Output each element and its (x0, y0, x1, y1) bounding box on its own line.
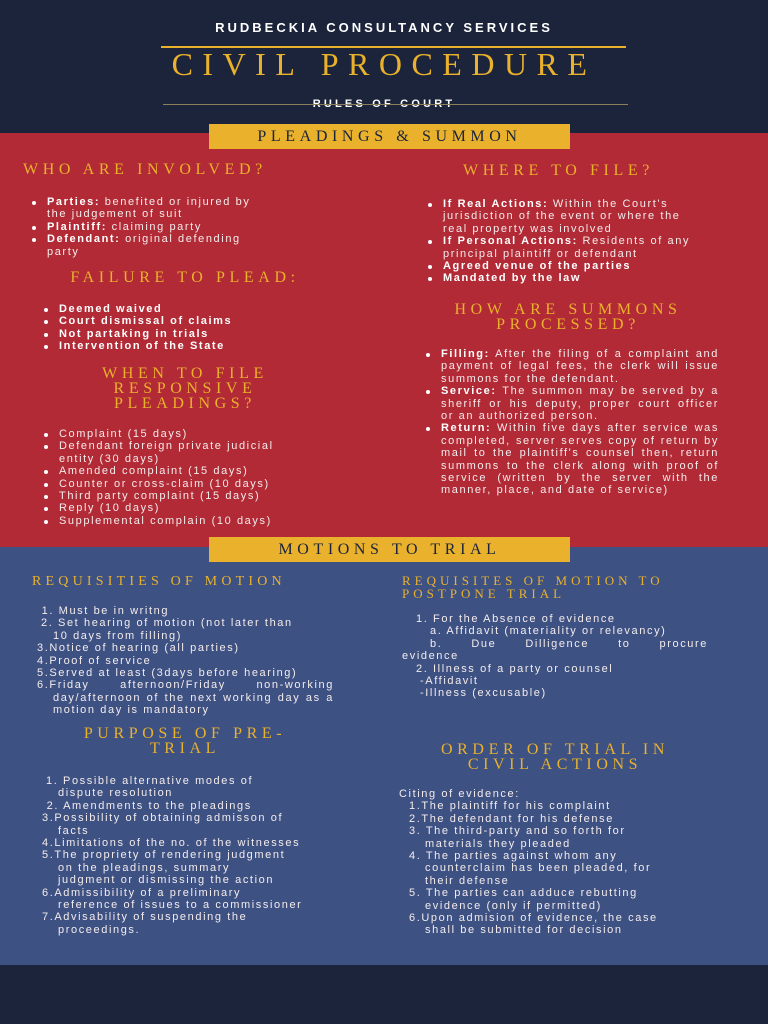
list: purpose: judgment or dismissing the action (58, 874, 274, 886)
list: who are involved: the judgement of suit (47, 208, 183, 220)
list: order of trial: evidence (only if permitted) (425, 900, 602, 912)
list: order of trial: Citing of evidence: (399, 788, 520, 800)
list: when to file: Reply (10 days) (59, 502, 160, 514)
subtitle: RULES OF COURT (313, 98, 455, 110)
list: requisities: 3.Notice of hearing (all parties) (37, 642, 240, 654)
heading: order of trial (441, 741, 669, 773)
heading: when to file: RESPONSIVE (114, 380, 256, 397)
list: order of trial (399, 788, 658, 936)
list: when to file (44, 428, 274, 527)
list: postpone: Dilligence (525, 638, 589, 650)
list: requisities: 5.Served at least (3days before hearing) (37, 667, 297, 679)
list: where to file: jurisdiction of the event or where the (443, 210, 681, 222)
list: postpone: Due (471, 638, 496, 650)
heading: purpose of pre-trial: TRIAL (150, 740, 220, 757)
heading: purpose of pre-trial (84, 725, 286, 757)
heading: summons: PROCESSED? (496, 316, 640, 333)
section banner: motions (209, 537, 570, 562)
list: failure to plead: Deemed waived (59, 303, 162, 315)
list: where to file: Agreed venue of the parties (443, 260, 631, 272)
list: postpone: -Illness (excusable) (420, 687, 547, 699)
list: order of trial: 4. The parties against whom any (409, 850, 617, 862)
list: purpose: 4.Limitations of the no. of the witnesses (42, 837, 300, 849)
heading: postpone trial: POSTPONE TRIAL (402, 586, 565, 601)
heading: order of trial: ORDER OF TRIAL IN (441, 741, 669, 758)
list: failure to plead (44, 303, 232, 352)
list: postpone: evidence (402, 650, 459, 662)
heading: postpone trial: REQUISITES OF MOTION TO (402, 573, 664, 588)
title: CIVIL PROCEDURE (172, 46, 596, 82)
list: when to file: Defendant foreign private judicial (59, 440, 274, 452)
list: who are involved: party (47, 246, 79, 258)
list: postpone: b. (430, 638, 442, 650)
blue section (0, 547, 768, 965)
list: purpose: 6.Admissibility of a preliminary (42, 887, 241, 899)
list: purpose: 1. Possible alternative modes of (46, 775, 253, 787)
section banner: pleadings (209, 124, 570, 149)
list: order of trial: shall be submitted for decision (425, 924, 623, 936)
list: where to file: principal plaintiff or defendant (443, 248, 638, 260)
heading: who are involved: WHO ARE INVOLVED? (23, 161, 267, 178)
list: purpose: 3.Possibility of obtaining admisson of (42, 812, 283, 824)
section banner: pleadings: PLEADINGS & SUMMON (257, 128, 522, 145)
list: purpose: dispute resolution (58, 787, 173, 799)
list: purpose: proceedings. (58, 924, 140, 936)
heading: when to file: WHEN TO FILE (102, 365, 268, 382)
list: order of trial: 5. The parties can adduce rebutting (409, 887, 638, 899)
list: when to file: Amended complaint (15 days) (59, 465, 248, 477)
list: requisities: 6.Friday afternoon/Friday non-working day/afternoon of the next working day as a motion day is mandatory (37, 679, 334, 716)
list: where to file: Mandated by the law (443, 272, 581, 284)
list: who are involved: Parties: benefited or injured by (47, 196, 250, 208)
heading: order of trial: CIVIL ACTIONS (468, 756, 642, 773)
list: requisities (37, 605, 334, 716)
list: postpone: to (618, 638, 630, 650)
list: failure to plead: Not partaking in trials (59, 328, 209, 340)
heading: when to file (102, 365, 268, 412)
heading: postpone trial (402, 573, 664, 601)
list: postpone: 2. Illness of a party or counsel (416, 663, 613, 675)
list: who are involved (32, 196, 250, 258)
list: requisities: 2. Set hearing of motion (not later than (41, 617, 293, 629)
list: summons: Return: Within five days after service was completed, server serves copy of return by mail to the plaintiff's counsel then, return summons to the clerk along with proof of service (written by the server with the manner, place, and date of service) (441, 422, 719, 496)
list: postpone: a. Affidavit (materiality or relevancy) (430, 625, 666, 637)
list: order of trial: 2.The defendant for his defense (409, 813, 614, 825)
section banner: motions: MOTIONS TO TRIAL (278, 541, 501, 558)
list: where to file: If Personal Actions: Residents of any (443, 235, 690, 247)
heading: requisities of motion: REQUISITIES OF MOTION (32, 574, 286, 589)
red section (0, 133, 768, 547)
list: order of trial: counterclaim has been pleaded, for (425, 862, 651, 874)
heading: failure to plead: FAILURE TO PLEAD: (70, 269, 300, 286)
list: who are involved: Defendant: original defending (47, 233, 241, 245)
list: when to file: entity (30 days) (59, 453, 160, 465)
list: order of trial: their defense (425, 875, 509, 887)
list: purpose: 2. Amendments to the pleadings (47, 800, 252, 812)
heading: when to file: PLEADINGS? (114, 395, 256, 412)
list: purpose (42, 775, 302, 936)
list: summons (426, 348, 719, 496)
list: purpose: facts (58, 825, 89, 837)
heading: where to file: WHERE TO FILE? (463, 162, 654, 179)
list: where to file: If Real Actions: Within the Court's (443, 198, 668, 210)
list: order of trial: 6.Upon admision of evidence, the case (409, 912, 658, 924)
list: postpone (402, 613, 708, 699)
list: when to file: Complaint (15 days) (59, 428, 188, 440)
list: postpone: -Affidavit (420, 675, 479, 687)
list: where to file (428, 198, 690, 284)
list: failure to plead: Court dismissal of claims (59, 315, 232, 327)
list: when to file: Third party complaint (15 days) (59, 490, 260, 502)
list: when to file: Counter or cross-claim (10 days) (59, 478, 270, 490)
list: requisities: 10 days from filling) (53, 630, 182, 642)
list: who are involved: Plaintiff: claiming party (47, 221, 202, 233)
list: purpose: reference of issues to a commissioner (58, 899, 302, 911)
list: where to file: real property was involved (443, 223, 612, 235)
list: purpose: 5.The propriety of rendering judgment (42, 849, 285, 861)
list: order of trial: 3. The third-party and so forth for (409, 825, 626, 837)
company name: RUDBECKIA CONSULTANCY SERVICES (215, 20, 553, 35)
list: summons: Service: The summon may be served by a sheriff or his deputy, proper court officer or an authorized person. (441, 385, 719, 422)
heading: summons (454, 301, 681, 333)
list: purpose: on the pleadings, summary (58, 862, 230, 874)
list: requisities: 1. Must be in writng (42, 605, 169, 617)
heading: purpose of pre-trial: PURPOSE OF PRE- (84, 725, 286, 742)
list: order of trial: 1.The plaintiff for his complaint (409, 800, 611, 812)
list: postpone: 1. For the Absence of evidence (416, 613, 616, 625)
list: when to file: Supplemental complain (10 days) (59, 515, 272, 527)
list: summons: Filling: After the filing of a complaint and payment of legal fees, the clerk will issue summons for the defendant. (441, 348, 719, 385)
header band (0, 0, 768, 133)
list: purpose: 7.Advisability of suspending the (42, 911, 247, 923)
list: order of trial: materials they pleaded (425, 838, 571, 850)
list: requisities: 4.Proof of service (37, 655, 151, 667)
heading: summons: HOW ARE SUMMONS (455, 301, 681, 318)
list: failure to plead: Intervention of the State (59, 340, 225, 352)
list: postpone: procure (660, 638, 708, 650)
